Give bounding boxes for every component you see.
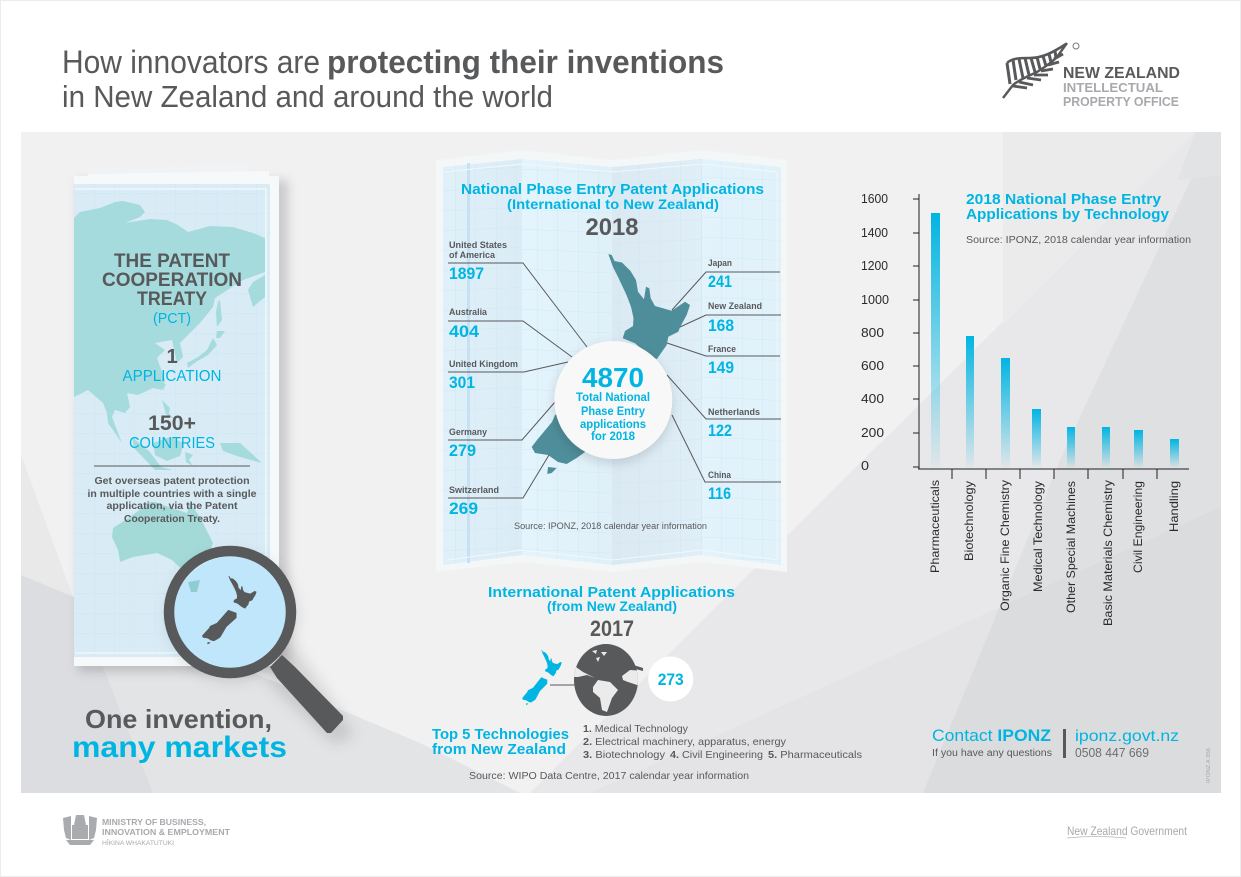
label: PCT: (PCT) [153,310,191,327]
heading: top 5 technologies [432,726,569,758]
contact block [932,726,1179,760]
country: Japan: 241 [708,273,732,291]
brochure sheets [74,164,288,672]
text: brochure description: Get overseas patent protection [94,476,250,487]
heading: chart title: 2018 National Phase Entry [966,191,1162,208]
x axis labels [928,480,1181,626]
icon: magnifying glass over New Zealand [166,550,355,745]
stat: 150+ countries: COUNTRIES [129,435,215,452]
x axis labels: Organic Fine Chemistry [998,480,1012,611]
heading: top 5 technologies: Top 5 Technologies [432,726,569,743]
leader lines [448,263,781,498]
y axis labels: 800 [861,326,884,340]
icon: New Zealand in blue [522,650,562,705]
y axis labels: 1600 [861,192,888,206]
country: Australia [449,307,488,341]
country: Australia: Australia [449,307,488,317]
source note: Source: IPONZ, 2018 calendar year information [514,521,707,532]
country: Germany: 279 [449,442,476,460]
footer: ministry logo: INNOVATION & EMPLOYMENT [102,827,231,837]
country: United Kingdom: United Kingdom [449,359,518,369]
heading: national phase entry patent applications [461,181,764,212]
x axis labels: Biotechnology [962,481,976,561]
contact block: If you have any questions [932,748,1052,759]
country: United Kingdom: 301 [449,374,475,392]
y axis labels: 0 [861,459,869,473]
Australia [112,502,213,592]
heading: the patent cooperation treaty: COOPERATION [102,270,242,291]
country: Switzerland: Switzerland [449,485,499,495]
footer: New Zealand Government: New Zealand Government [1067,824,1188,838]
country: Switzerland [449,485,499,518]
heading: top 5 technologies: from New Zealand [432,741,566,758]
callout: 4870 total applications: Phase Entry [581,404,645,418]
tagline: one invention, many markets [72,704,287,764]
callout: 4870 total applications: Total National [576,390,650,404]
bars [931,213,1179,467]
tagline: one invention, many markets: many markets [72,731,287,764]
country: France [708,344,736,377]
country: Japan: Japan [708,258,732,268]
logo: New Zealand Intellectual Property Office: PROPERTY OFFICE [1063,94,1179,109]
country: Germany: Germany [449,427,487,437]
heading: the patent cooperation treaty: THE PATENT [114,251,230,272]
x axis labels: Other Special Machines [1064,481,1078,613]
x axis labels: Handling [1167,481,1181,532]
list: top 5 technologies: 4. Civil Engineering [670,749,763,761]
heading: international patent applications [488,584,735,614]
country: New Zealand [708,301,762,335]
section: international patent applications [432,584,862,782]
heading: international patent applications: (from New Zealand) [547,599,677,614]
stat: 150+ countries [129,412,215,452]
bar chart: applications by technology [861,191,1191,626]
axes [913,194,1189,479]
country: China: 116 [708,485,731,503]
list: top 5 technologies: 5. Pharmaceuticals [768,749,862,761]
panel: folded map of national phase entries [436,150,787,572]
stat: 1 application: 1 [166,346,178,368]
year: 2018: 2018 [586,214,638,241]
callout: 273: 273 [658,670,684,689]
heading: chart title: Applications by Technology [966,206,1170,223]
country: France: France [708,344,736,354]
country: New Zealand: New Zealand [708,301,762,311]
source note: Source: WIPO Data Centre, 2017 calendar year information [469,770,749,782]
icon: silver fern [1003,43,1067,98]
text: brochure description: in multiple countries with a single [88,489,257,500]
list: top 5 technologies: 2. Electrical machinery, apparatus, energy [583,736,787,748]
stat: 1 application [122,346,222,385]
footer: ministry logo: MINISTRY OF BUSINESS, [102,817,206,827]
tagline: one invention, many markets: One invention, [85,704,272,734]
footer: ministry logo [63,815,231,847]
source note: Source: IPONZ, 2018 calendar year information [966,235,1191,246]
x axis labels: Medical Technology [1031,481,1045,592]
map: New Zealand [532,254,690,474]
list: top 5 technologies: 1. Medical Technology [583,723,689,735]
text: brochure description: application, via the Patent [106,501,238,512]
x axis labels: Pharmaceuticals [928,480,942,573]
country: China: China [708,470,732,480]
country: Netherlands: 122 [708,422,732,440]
heading: chart title [966,191,1170,223]
y axis labels: 1200 [861,259,888,273]
country: Australia: 404 [449,323,480,341]
y axis labels: 600 [861,359,884,373]
icon: coat of arms [63,815,97,845]
text: brochure description: Cooperation Treaty. [124,514,220,525]
callout: 4870 total applications: 4870 [582,362,644,393]
panel: grey geometric background [21,132,1221,793]
list: top 5 technologies: 3. Biotechnology [583,749,666,761]
callout: 4870 total applications [553,341,673,464]
callout: 4870 total applications: applications [580,417,646,431]
document reference: IPONZ A 356 [1206,748,1212,783]
country: United Kingdom [449,359,518,392]
map paper [436,150,787,572]
stat: 150+ countries: 150+ [148,412,196,435]
logo: New Zealand Intellectual Property Office: INTELLECTUAL [1063,80,1163,95]
x axis labels: Civil Engineering [1131,481,1145,573]
country: Switzerland: 269 [449,500,478,518]
country: China [708,470,732,503]
icon: globe [572,644,648,716]
page header title: How innovators are [62,44,320,80]
country: United States of America: United States [449,240,507,250]
country: United States of America: 1897 [449,265,484,283]
country: France: 149 [708,359,734,377]
country: Netherlands [708,407,760,440]
y axis labels [861,192,889,473]
country: Germany [449,427,487,460]
panel: patent cooperation treaty brochure [74,164,288,672]
footer: ministry logo: HĪKINA WHAKATUTUKI [102,839,174,847]
heading: the patent cooperation treaty: TREATY [137,289,207,310]
logo: New Zealand Intellectual Property Office: NEW ZEALAND [1063,65,1180,82]
callout: 273 [648,656,693,702]
heading: national phase entry patent applications: (International to New Zealand) [507,197,719,212]
list: top 5 technologies [583,723,862,761]
country: United States of America: of America [449,250,496,260]
contact block: 0508 447 669 [1075,746,1149,760]
logo: New Zealand Intellectual Property Office [1003,43,1180,109]
callout: 4870 total applications: for 2018 [591,429,635,443]
page header title: protecting their inventions [327,44,724,80]
country: Japan [708,258,732,291]
y axis labels: 400 [861,392,884,406]
year: 2017: 2017 [590,616,634,641]
contact block: iponz.govt.nz [1075,728,1179,745]
heading: international patent applications: International Patent Applications [488,584,735,601]
y axis labels: 1000 [861,293,889,307]
contact block: Contact IPONZ [932,726,1051,745]
map of Asia and Australia [74,201,265,470]
y axis labels: 1400 [861,226,888,240]
y axis labels: 200 [861,426,884,440]
text: brochure description [88,476,257,525]
heading: the patent cooperation treaty [102,251,242,310]
stat: 1 application: APPLICATION [122,368,222,385]
heading: national phase entry patent applications: National Phase Entry Patent Applications [461,181,764,198]
page header title [62,44,724,114]
country: New Zealand: 168 [708,317,734,335]
country: Netherlands: Netherlands [708,407,760,417]
x axis labels: Basic Materials Chemistry [1101,480,1115,626]
page header title: in New Zealand and around the world [62,79,553,114]
country: United States of America [449,240,507,283]
